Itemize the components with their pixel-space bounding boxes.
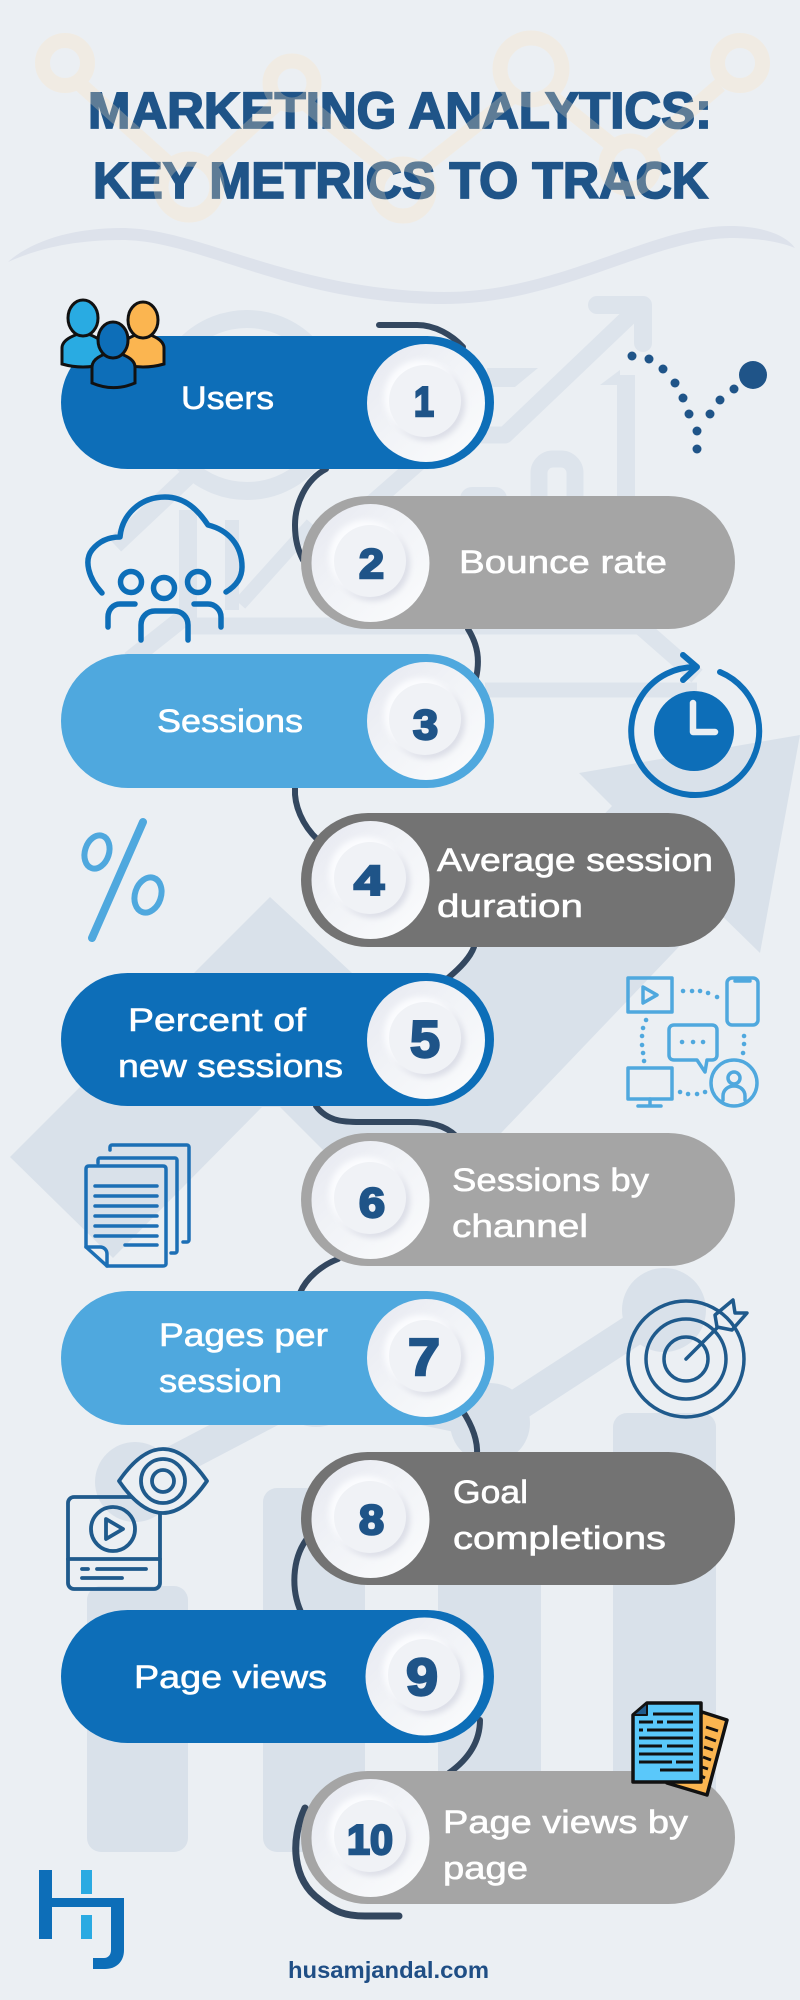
decorative wave under title (8, 226, 795, 304)
icon: target with dart (628, 1300, 747, 1417)
step 2: Bounce rate (301, 496, 735, 629)
step 10: Page views by page: 10 (347, 1816, 393, 1863)
step 4: Average session duration (301, 813, 735, 947)
step 8: Goal completions (301, 1452, 735, 1585)
step 5: Percent of new sessions (61, 973, 494, 1106)
step 6: Sessions by channel (301, 1133, 735, 1266)
step 9: Page views (61, 1610, 494, 1743)
title: MARKETING ANALYTICS: (88, 82, 712, 139)
step 9: Page views: 9 (406, 1649, 438, 1707)
step 3: Sessions: 3 (413, 701, 438, 748)
icon: percent sign (80, 822, 166, 938)
step 8: Goal completions: completions (453, 1520, 666, 1556)
step 6: Sessions by channel: Sessions by (452, 1162, 649, 1198)
connector line linking the steps (294, 325, 480, 1916)
step 4: Average session duration: Average session (437, 842, 713, 878)
website footer: husamjandal.com (288, 1957, 489, 1983)
step 2: Bounce rate: 2 (359, 540, 384, 587)
icon: dotted trend with end point (628, 352, 767, 454)
step 7: Pages per session (61, 1291, 494, 1425)
icon: colored documents (633, 1703, 727, 1795)
background: analytics magnifier and arrow shapes (115, 305, 697, 690)
step 5: Percent of new sessions: new sessions (118, 1048, 343, 1084)
step 10: Page views by page (301, 1771, 735, 1904)
step 2: Bounce rate: Bounce rate (459, 544, 667, 580)
logo: HJ monogram (39, 1870, 124, 1969)
icon: clock with refresh arrow (631, 655, 759, 795)
step 10: Page views by page: Page views by (443, 1804, 688, 1840)
step 1: Users: 1 (414, 378, 434, 425)
step 3: Sessions (61, 654, 494, 788)
step 7: Pages per session: Pages per (159, 1317, 328, 1353)
background: faint orange line chart behind title (42, 38, 762, 216)
step 1: Users: Users (181, 380, 274, 416)
step 6: Sessions by channel: channel (452, 1208, 588, 1244)
title (88, 82, 712, 209)
step 5: Percent of new sessions: 5 (410, 1011, 440, 1069)
icon: video card with eye (68, 1449, 207, 1589)
step 4: Average session duration: duration (437, 888, 583, 924)
background: large zigzag arrow (10, 735, 800, 1258)
icon: three users (62, 300, 164, 388)
step 8: Goal completions: Goal (453, 1474, 528, 1510)
step 6: Sessions by channel: 6 (359, 1179, 385, 1226)
step 7: Pages per session: 7 (408, 1329, 440, 1387)
title: KEY METRICS TO TRACK (93, 152, 708, 209)
step 3: Sessions: Sessions (157, 703, 303, 739)
step 1: Users (61, 336, 494, 469)
step 8: Goal completions: 8 (359, 1496, 384, 1543)
step 7: Pages per session: session (159, 1363, 282, 1399)
step 4: Average session duration: 4 (354, 857, 385, 904)
icon: connected devices (628, 978, 758, 1106)
icon: stacked documents (86, 1145, 189, 1266)
step 5: Percent of new sessions: Percent of (128, 1002, 306, 1038)
step 9: Page views: Page views (134, 1659, 327, 1695)
step 10: Page views by page: page (443, 1850, 528, 1886)
icon: cloud with people (88, 497, 242, 640)
background: bar chart with trend line (87, 1268, 716, 1852)
